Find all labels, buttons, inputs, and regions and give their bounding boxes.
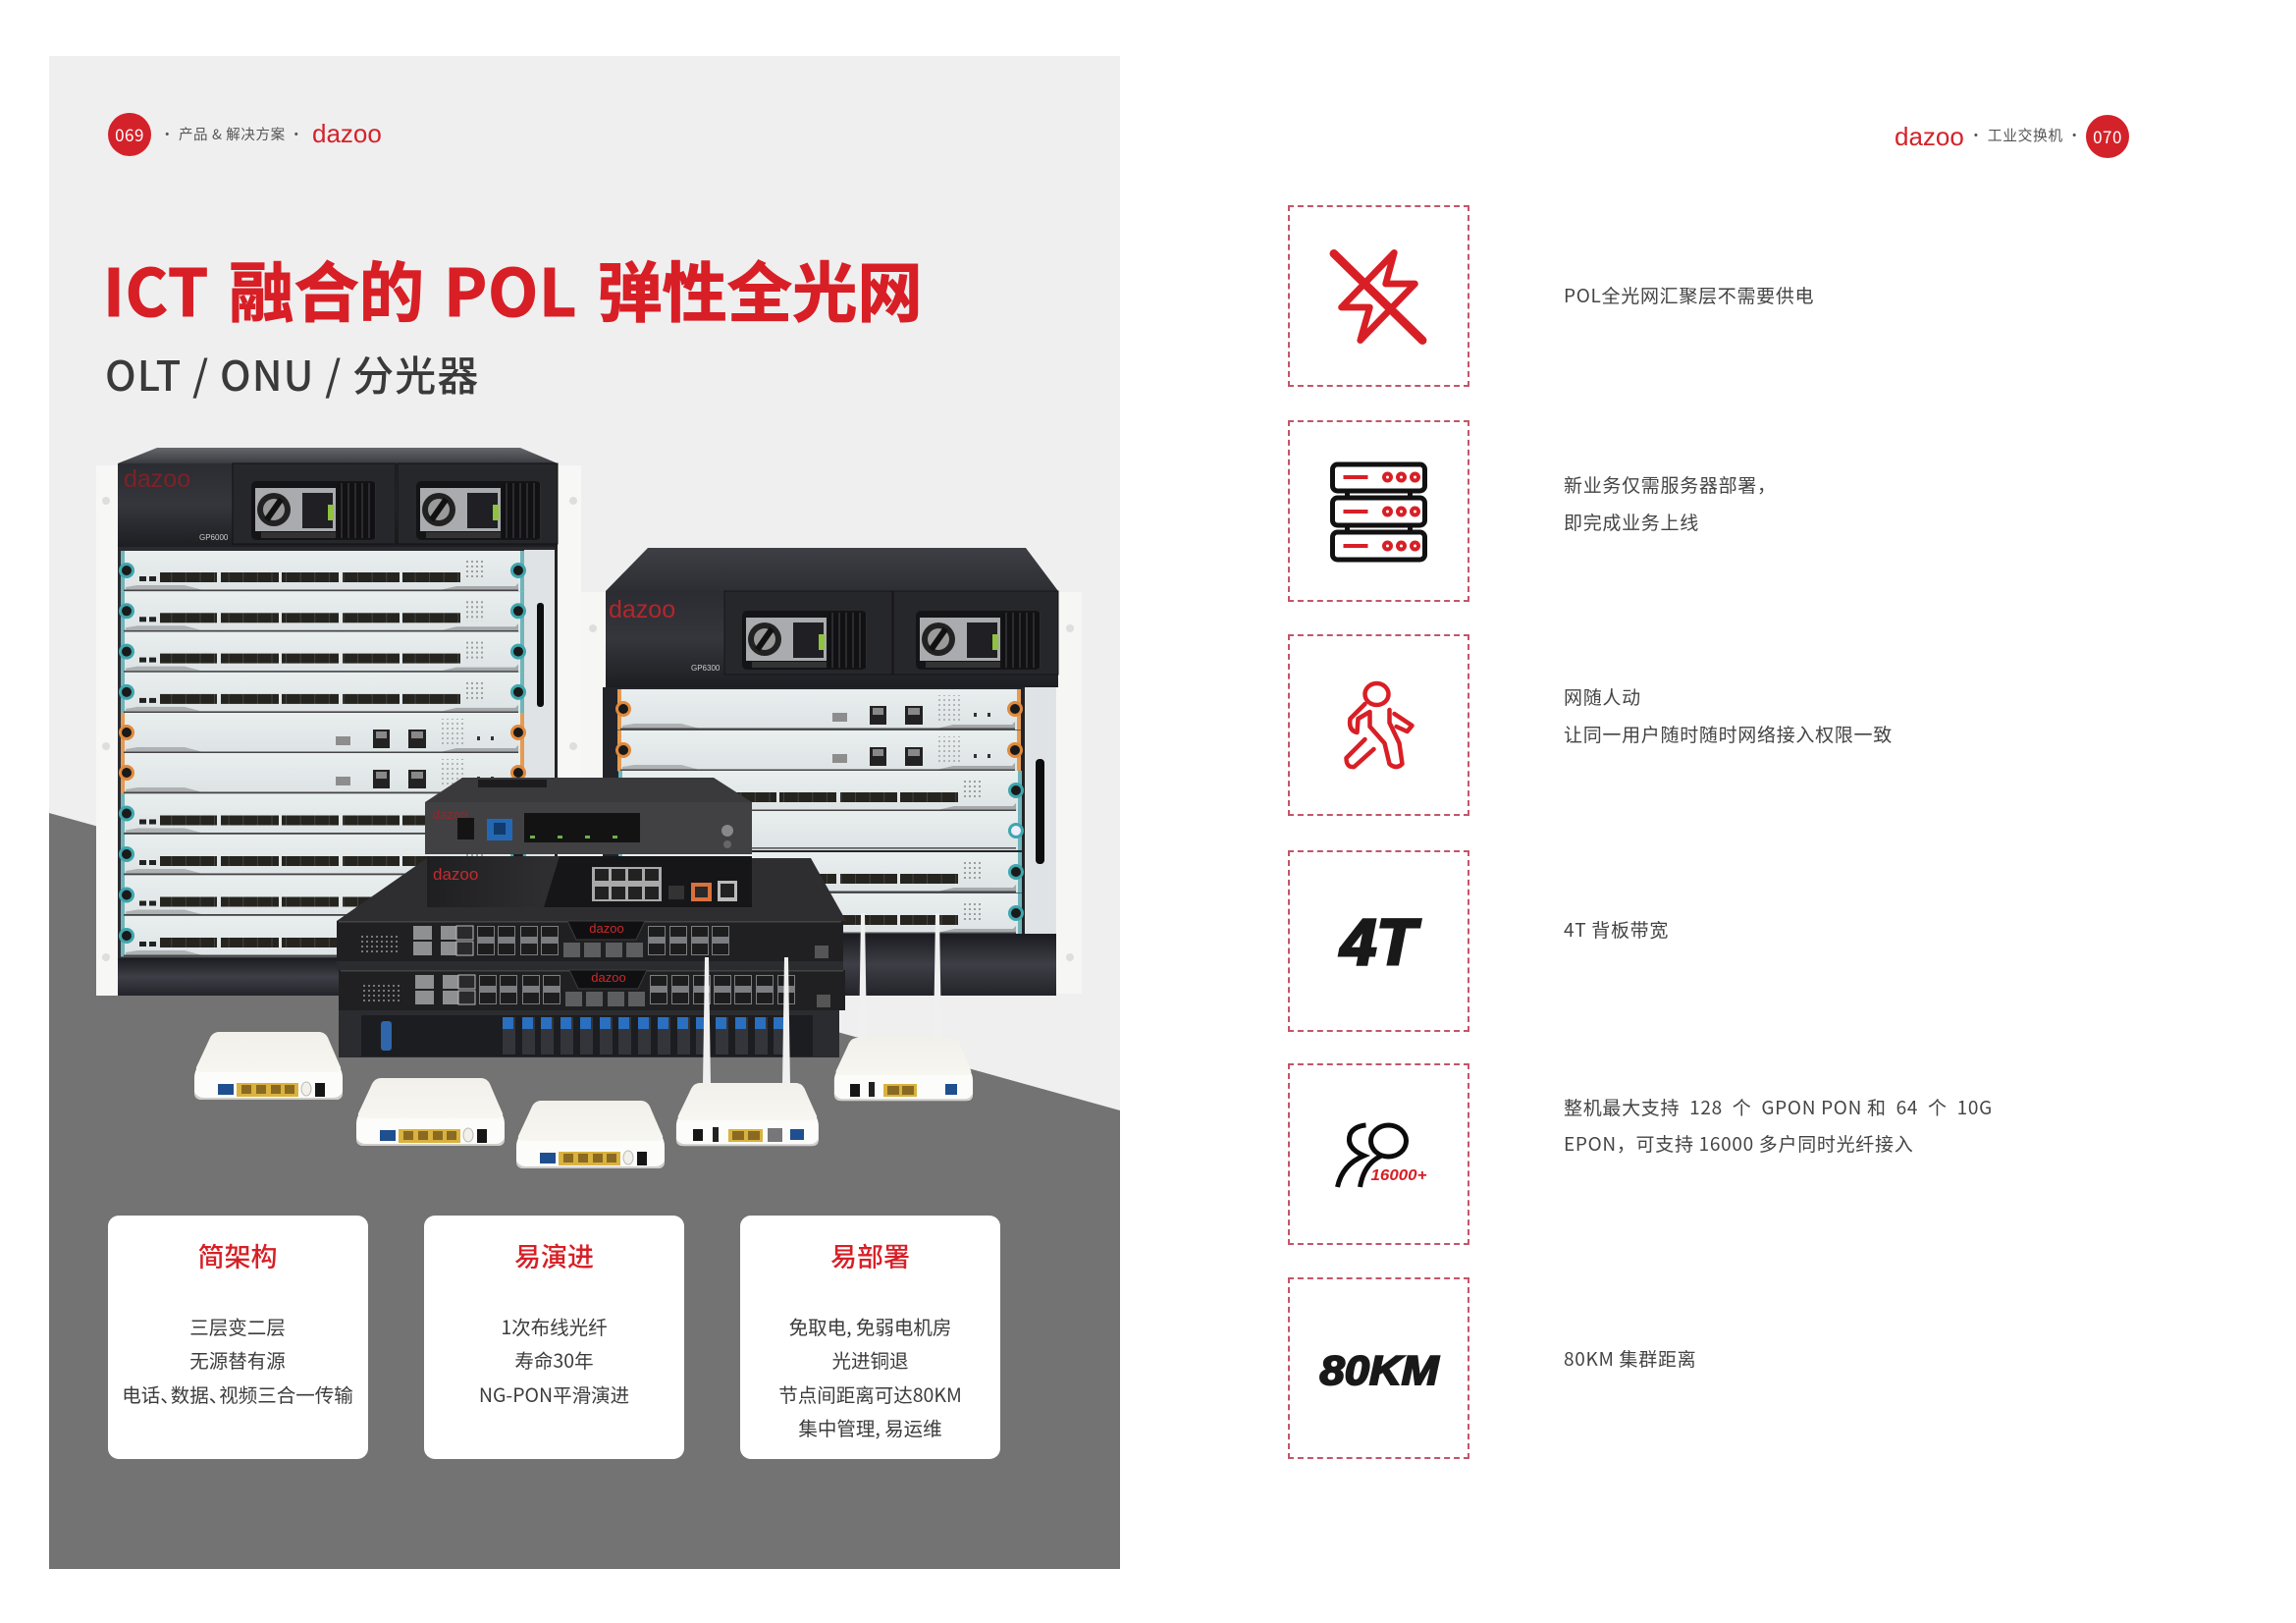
feature text 4: 4T 背板带宽 bbox=[1564, 915, 1669, 943]
ONU B bbox=[356, 1078, 505, 1146]
icon: 80KM distance text: 80KM bbox=[1319, 1347, 1440, 1393]
dashed frame 5 bbox=[1288, 1063, 1468, 1245]
rack 2: OLT chassis right bbox=[581, 548, 1082, 996]
card line 1: 免取电, 免弱电机房 bbox=[789, 1312, 951, 1340]
feature text 5 line 2: EPON，可支持 16000 多户同时光纤接入 bbox=[1564, 1130, 1913, 1157]
rack 2: OLT chassis right: dazoo bbox=[609, 596, 675, 623]
card line 2: 寿命30年 bbox=[514, 1345, 594, 1374]
rack 1: OLT chassis left bbox=[96, 448, 581, 996]
card line 3: NG-PON平滑演进 bbox=[479, 1380, 629, 1408]
feature text 1: POL全光网汇聚层不需要供电 bbox=[1564, 281, 1814, 308]
card: easy evolution bbox=[424, 1216, 684, 1459]
card line 2: 无源替有源 bbox=[189, 1345, 286, 1374]
dashed frame 6 bbox=[1288, 1277, 1468, 1459]
icon: 4T backplane text: 4T bbox=[1338, 905, 1420, 978]
dashed frame 4 bbox=[1288, 850, 1468, 1031]
header text: industrial switch: · 工业交换机 · bbox=[1969, 125, 2082, 145]
dashed frame 2 bbox=[1288, 420, 1468, 602]
card line 2: 光进铜退 bbox=[831, 1345, 909, 1374]
card: simple architecture bbox=[108, 1216, 367, 1459]
wireless router E with antennas bbox=[834, 913, 973, 1101]
card line 1: 1次布线光纤 bbox=[501, 1312, 608, 1340]
card line 3: 电话、数据、视频三合一传输 bbox=[122, 1380, 353, 1408]
dashed frame 3 bbox=[1288, 634, 1468, 816]
card line 4: 集中管理, 易运维 bbox=[798, 1413, 942, 1441]
subtitle: OLT / ONU / 分光器 bbox=[105, 344, 479, 404]
rack 1: OLT chassis left: GP6000 bbox=[199, 533, 229, 542]
rack 1: OLT chassis left: dazoo bbox=[124, 465, 190, 493]
page number badge 070: 070 bbox=[2093, 124, 2122, 148]
switch lid and upper device bbox=[337, 856, 846, 921]
switches GP3000 and splitter chassis bbox=[337, 921, 845, 1057]
rack 2: OLT chassis right: GP6300 bbox=[691, 664, 721, 673]
dashed frame 1 bbox=[1288, 205, 1468, 387]
feature text 2 line 1: 新业务仅需服务器部署， bbox=[1564, 471, 1777, 498]
card line 3: 节点间距离可达80KM bbox=[778, 1380, 962, 1408]
card heading: 简架构 bbox=[198, 1236, 277, 1274]
logo: dazoo right: dazoo bbox=[1895, 122, 1964, 151]
feature text 6: 80KM 集群距离 bbox=[1564, 1345, 1696, 1372]
feature text 3 line 1: 网随人动 bbox=[1564, 683, 1641, 709]
feature text 2 line 2: 即完成业务上线 bbox=[1564, 509, 1699, 535]
card heading: 易部署 bbox=[830, 1236, 910, 1274]
logo: dazoo left: dazoo bbox=[312, 119, 382, 148]
title: ICT 融合的 POL 弹性全光网 bbox=[103, 242, 923, 336]
small ONU box on top of the stack bbox=[425, 778, 752, 854]
ONU C bbox=[516, 1101, 665, 1168]
feature text 5 line 1: 整机最大支持 128 个 GPON PON 和 64 个 10G bbox=[1564, 1094, 1993, 1120]
ONU A bbox=[194, 1032, 343, 1100]
page number badge 069 bbox=[108, 113, 151, 156]
icon: 16000+ users: 16000+ bbox=[1370, 1167, 1427, 1184]
card heading: 易演进 bbox=[514, 1236, 594, 1274]
card line 1: 三层变二层 bbox=[189, 1312, 286, 1340]
panel: dark grey diagonal lower area bbox=[49, 813, 1120, 1569]
card: easy deployment bbox=[740, 1216, 1000, 1459]
page number badge 070 bbox=[2086, 115, 2129, 158]
switch lid and upper device: dazoo bbox=[433, 865, 478, 884]
feature text 3 line 2: 让同一用户随时随时网络接入权限一致 bbox=[1564, 721, 1893, 746]
wireless router D with antennas bbox=[676, 957, 819, 1146]
header text: products and solutions: · 产品 & 解决方案 · bbox=[160, 124, 304, 144]
page number badge 069: 069 bbox=[115, 122, 144, 146]
small ONU box on top of the stack: dazoo bbox=[433, 807, 467, 822]
panel: left grey page background bbox=[49, 56, 1120, 1569]
